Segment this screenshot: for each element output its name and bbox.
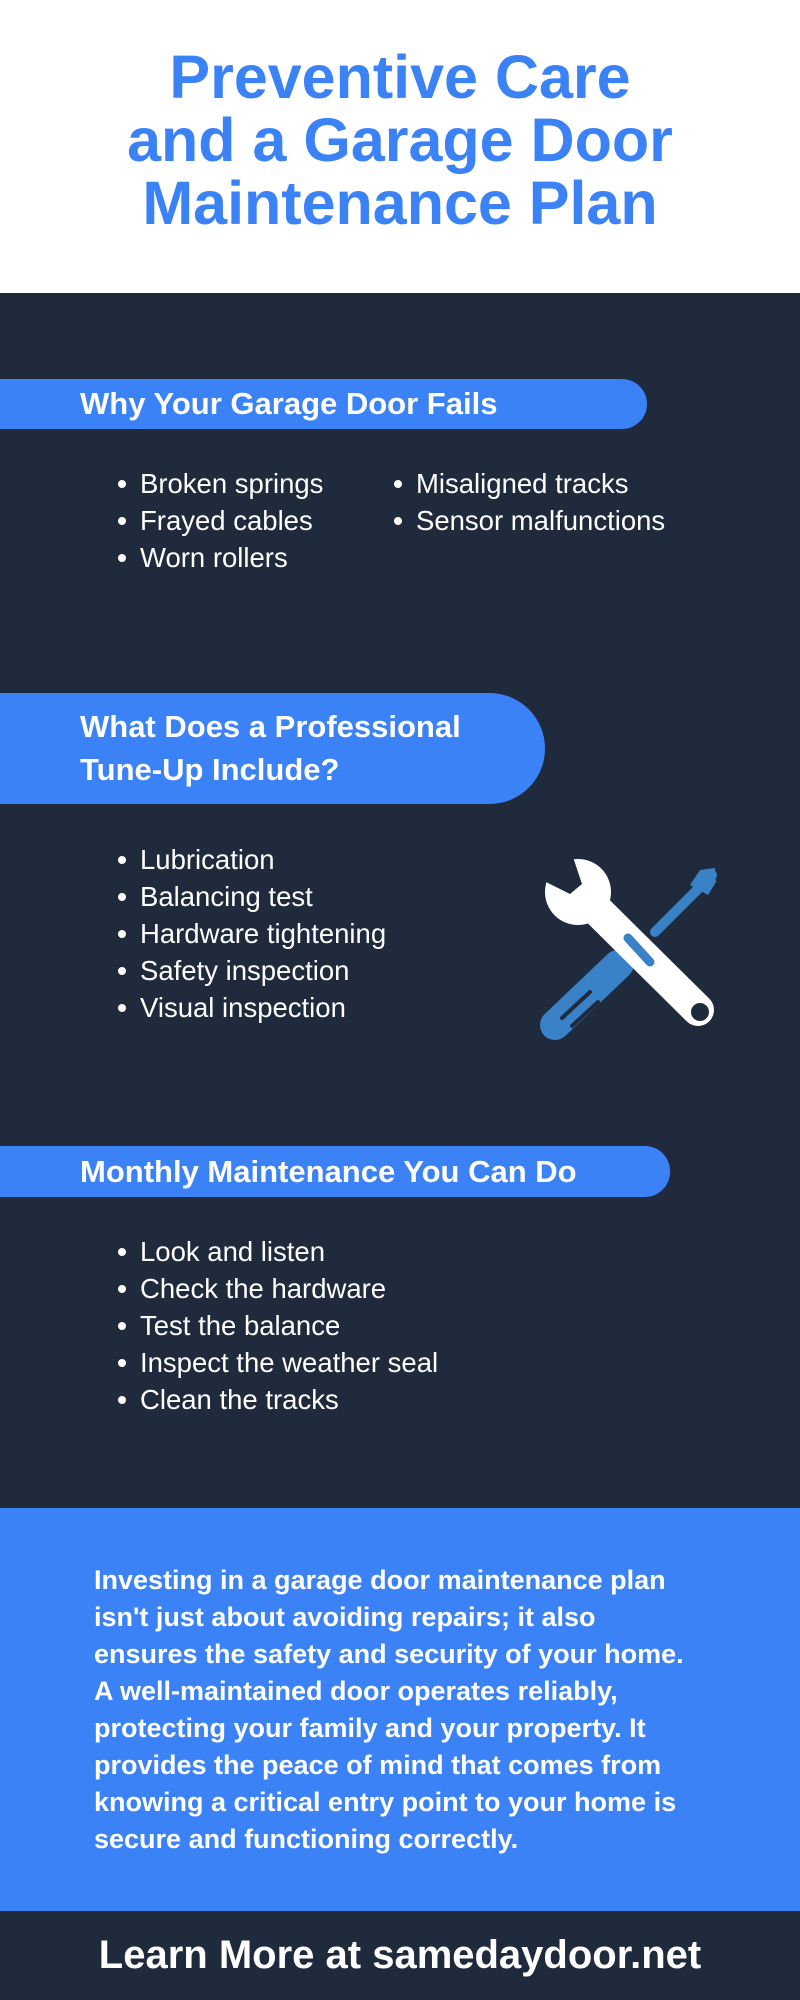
- title: Preventive Care: [169, 43, 631, 111]
- list: tune-up items: [118, 844, 386, 1023]
- list: monthly tasks: Inspect the weather seal: [140, 1347, 438, 1378]
- list: tune-up items: Lubrication: [140, 844, 275, 875]
- title: and a Garage Door: [127, 106, 673, 174]
- list: tune-up items: Safety inspection: [140, 955, 349, 986]
- list: failure causes column 1: [118, 468, 323, 573]
- list: failure causes column 1: Worn rollers: [140, 542, 288, 573]
- list: tune-up items: Visual inspection: [140, 992, 346, 1023]
- list: failure causes column 2: Misaligned tracks: [416, 468, 628, 499]
- panel: conclusion: [0, 1508, 800, 1911]
- list: failure causes column 2: Sensor malfunctions: [416, 505, 665, 536]
- list: monthly tasks: Check the hardware: [140, 1273, 386, 1304]
- heading: professional tune-up: [0, 693, 545, 804]
- footer: Learn More at samedaydoor.net: [99, 1933, 701, 1977]
- list: monthly tasks: Test the balance: [140, 1310, 340, 1341]
- list: monthly tasks: [118, 1236, 438, 1415]
- list: monthly tasks: Clean the tracks: [140, 1384, 339, 1415]
- list: tune-up items: Balancing test: [140, 881, 313, 912]
- heading: professional tune-up: What Does a Professional: [80, 709, 461, 744]
- text: conclusion paragraph: Investing in a garage door maintenance plan isn't just about avoiding repairs; it also ensures the safety and security of your home. A well-maintained door operates reliably, protecting your family and your property. It provides the peace of mind that comes from knowing a critical entry point to your home is secure and functioning correctly.: [94, 1565, 684, 1854]
- heading: professional tune-up: Tune-Up Include?: [80, 752, 339, 787]
- list: failure causes column 1: Broken springs: [140, 468, 323, 499]
- title: Maintenance Plan: [142, 169, 658, 237]
- heading: why your garage door fails: [0, 379, 647, 429]
- list: failure causes column 2: [394, 468, 665, 536]
- list: tune-up items: Hardware tightening: [140, 918, 386, 949]
- icon: wrench and screwdriver: [540, 859, 717, 1040]
- title: [0, 0, 800, 293]
- heading: monthly maintenance: [0, 1146, 670, 1197]
- list: monthly tasks: Look and listen: [140, 1236, 325, 1267]
- heading: why your garage door fails: Why Your Garage Door Fails: [80, 386, 497, 421]
- heading: monthly maintenance: Monthly Maintenance You Can Do: [80, 1154, 577, 1189]
- list: failure causes column 1: Frayed cables: [140, 505, 313, 536]
